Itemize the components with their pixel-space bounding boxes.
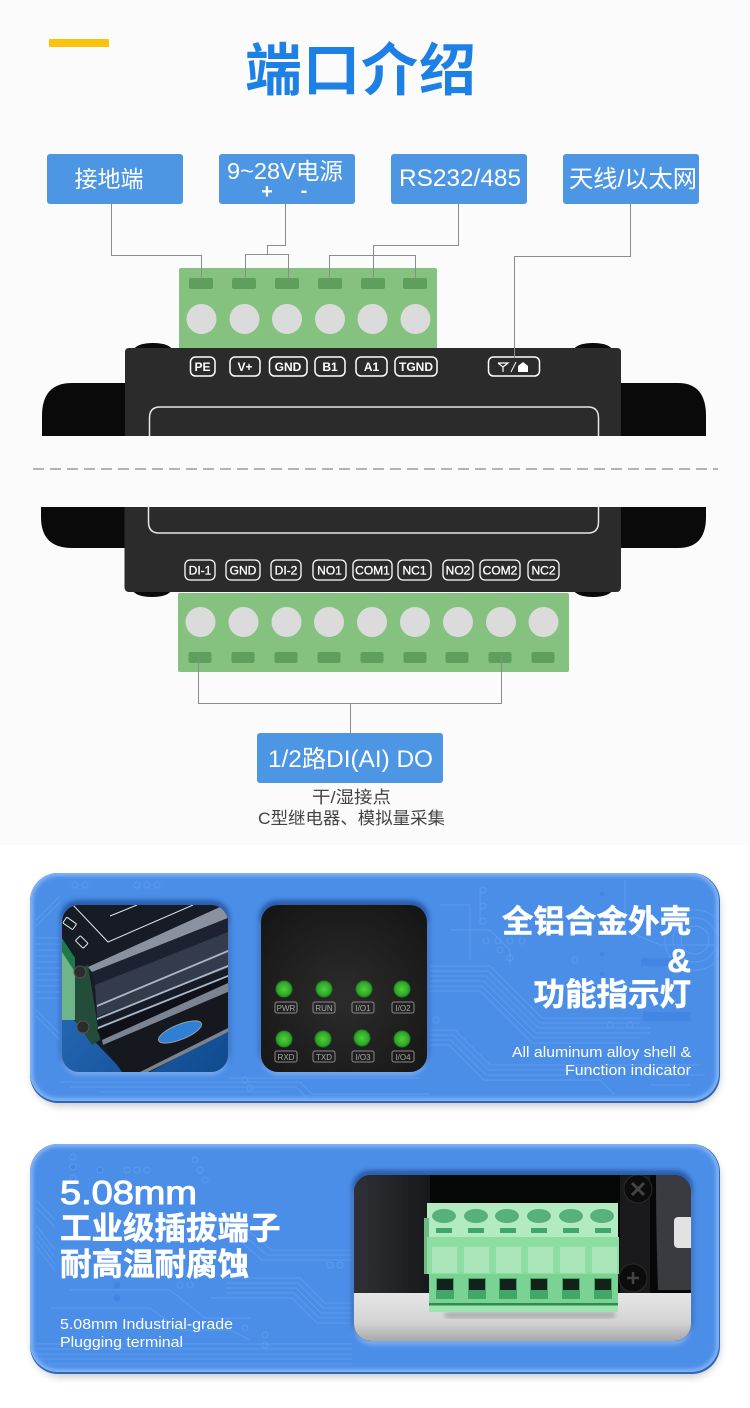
panel subtext: plug terminal [60,1316,233,1351]
panel: plug terminal [30,1144,720,1377]
icon: antenna and ethernet [498,362,528,372]
port labels: top: GND [275,360,302,374]
port labels: bottom: DI-1 [189,564,212,578]
note: contact types: C型继电器、模拟量采集 [258,809,445,828]
note: contact types [258,788,445,828]
accent bar [49,39,109,47]
panel subtext: plug terminal: Plugging terminal [60,1334,183,1351]
port labels: top: B1 [322,360,338,374]
port labels: bottom: DI-2 [275,564,298,578]
label: DI/DO: 1/2路DI(AI) DO [268,746,433,773]
photo: indicator LEDs: I/O4 [395,1053,411,1062]
label: RS232/485 [391,154,527,204]
bracket: lower left [41,507,125,548]
screen outline: upper [150,407,598,436]
port labels: bottom: NC1 [402,564,427,578]
label: power [219,154,355,204]
panel heading: aluminium shell: & [667,942,691,979]
port labels: top: TGND [399,360,433,374]
terminal block: bottom [178,593,569,672]
port labels: top: V+ [237,360,253,374]
panel subtext: aluminium shell: Function indicator [565,1062,691,1079]
port labels: bottom: COM1 [355,564,390,578]
port labels: top: A1 [364,360,379,374]
label: power: + [261,181,273,203]
green connector [424,1203,619,1312]
port labels: bottom: NC2 [531,564,556,578]
panel heading: plug terminal: 5.08mm [60,1174,197,1211]
screws: lower [133,583,612,597]
photo: indicator LEDs: RXD [278,1053,295,1062]
label: RS232/485: RS232/485 [399,165,521,192]
port labels: bottom: GND [230,564,257,578]
photo: aluminium shell [60,900,230,1075]
label: DI/DO [257,733,443,783]
panel: aluminium shell and indicators [30,873,725,1106]
dashed separator [33,468,718,470]
screen outline: lower [148,507,598,533]
bracket: upper right [621,383,706,436]
panel heading: aluminium shell: 功能指示灯 [533,976,691,1012]
port labels: bottom: COM2 [483,564,518,578]
label: 接地端: 接地端 [74,166,144,192]
panel heading: aluminium shell: 全铝合金外壳 [502,903,691,939]
photo: indicator LEDs: RUN [315,1004,333,1013]
label: 接地端 [47,154,183,204]
photo: indicator LEDs [259,900,429,1075]
port labels: bottom [185,560,559,580]
panel subtext: plug terminal: 5.08mm Industrial-grade [60,1316,233,1333]
title: 端口介绍 [245,39,477,103]
port labels: top [190,357,540,376]
bracket: upper left [42,383,125,436]
screws: upper [134,343,612,357]
note: contact types: 干/湿接点 [312,788,391,807]
circuit pattern [36,1154,352,1364]
device body: upper [125,348,621,436]
connector lines: top [112,204,630,358]
panel subtext: aluminium shell [512,1044,691,1079]
screw: lower [619,1264,647,1292]
panel heading: aluminium shell [502,903,691,1012]
photo: indicator LEDs: PWR [277,1004,296,1013]
bracket: lower right [621,507,706,548]
photo: indicator LEDs: I/O1 [355,1004,371,1013]
circuit pattern [36,880,725,1099]
panel subtext: aluminium shell: All aluminum alloy shell & [512,1044,691,1061]
label: antenna / ethernet: 天线/以太网 [569,166,697,193]
device body: lower [124,507,621,592]
port labels: top: PE [194,360,211,374]
photo: indicator LEDs: I/O2 [395,1004,411,1013]
port labels: bottom: NO1 [317,564,342,578]
photo: indicator LEDs: I/O3 [355,1053,371,1062]
photo: plug terminal [352,1170,694,1345]
panel heading: plug terminal: 工业级插拔端子 [60,1210,281,1246]
connector lines: bottom [198,655,502,733]
panel heading: plug terminal [60,1174,281,1282]
label: antenna / ethernet [563,154,699,204]
screw: upper [624,1175,652,1203]
label: power: 9~28V电源 [227,158,343,184]
panel heading: plug terminal: 耐高温耐腐蚀 [60,1246,249,1282]
terminal block: top [179,268,437,350]
photo: indicator LEDs: TXD [316,1053,332,1062]
label: power: - [301,180,307,202]
port labels: bottom: NO2 [446,564,471,578]
